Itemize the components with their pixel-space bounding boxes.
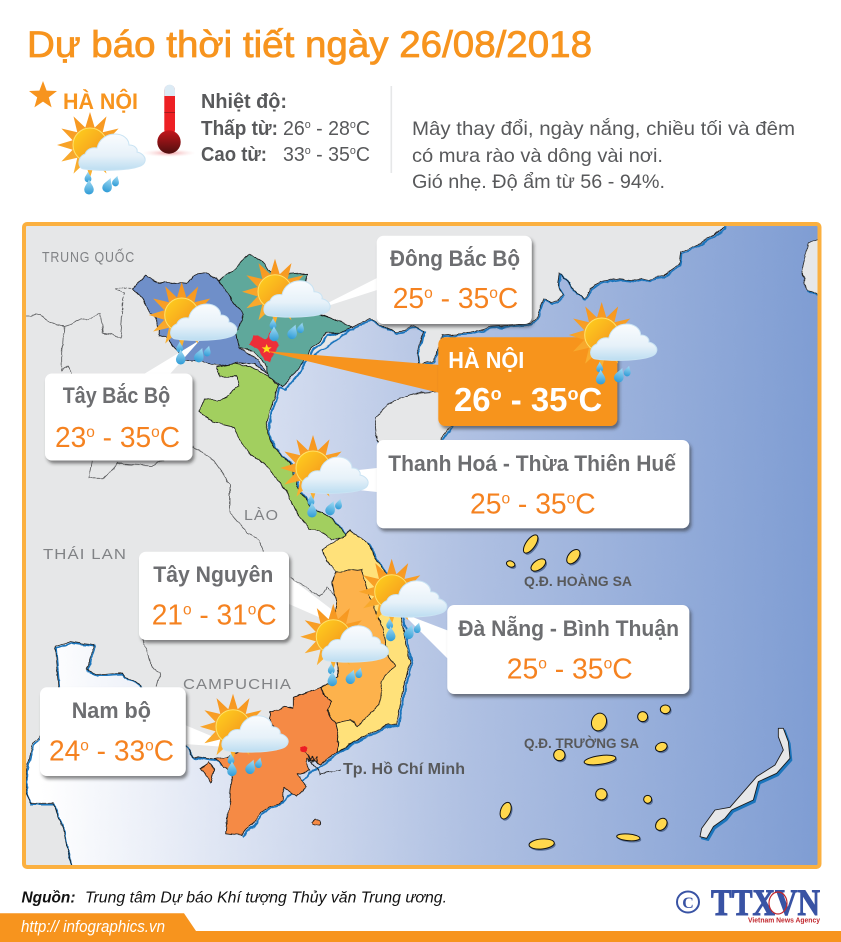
description text: Gió nhẹ. Độ ẩm từ 56 - 94%. [412, 171, 665, 193]
region: Thanh Hoá - Thừa Thiên Huế [198, 363, 347, 538]
temperature text: Thấp từ: [201, 118, 278, 140]
callout: Hà Nội [265, 337, 617, 426]
callout: Hà Nội: - 35 [502, 381, 567, 418]
icon: weather Nam bộ [200, 694, 288, 776]
callout: Đông Bắc Bộ: o [424, 285, 433, 302]
sea [25, 217, 837, 873]
callout: Đà Nẵng - Bình Thuận: 25 [507, 653, 539, 685]
callout: Hà Nội: C [579, 381, 602, 418]
region: Đông Bắc Bộ [220, 253, 352, 387]
callout: Nam bộ: - 33 [89, 736, 145, 768]
temperature text: Cao từ: [201, 144, 267, 166]
temperature text [201, 91, 370, 166]
callout: Tây Nguyên: o [183, 601, 192, 618]
callout: Đà Nẵng - Bình Thuận: Đà Nẵng - Bình Thuận [458, 616, 679, 641]
archipelago and city labels: Q.Đ. HOÀNG SA [524, 573, 632, 589]
blue coast shadow of Vietnam [242, 329, 412, 836]
callout: Hà Nội: 26 [454, 381, 491, 418]
callout: Tây Nguyên: 21 [152, 599, 184, 631]
callout: Nam bộ [40, 687, 240, 776]
country labels: LÀO [244, 507, 279, 524]
footer bar [0, 913, 841, 942]
callout: Hà Nội: o [567, 384, 579, 404]
temperature text: - 35 [311, 144, 350, 166]
footer link: http:// infographics.vn [21, 917, 165, 936]
region: Tây Nguyên [322, 569, 395, 727]
land: Hainan [377, 426, 454, 443]
panel: Hanoi forecast header [29, 81, 795, 194]
icon: weather Đà Nẵng [359, 559, 447, 641]
heading: Hà Nội: HÀ NỘI [63, 89, 138, 114]
callout: Đông Bắc Bộ: o [489, 285, 498, 302]
callout: Thanh Hoá - Thừa Thiên Huế: - 35 [510, 488, 567, 520]
temperature text: o [350, 119, 356, 131]
icon: star [29, 81, 57, 107]
callout: Đà Nẵng - Bình Thuận: o [604, 655, 612, 672]
icon: Hanoi star [262, 344, 272, 353]
temperature text: C [356, 118, 370, 140]
callout: Tây Nguyên: - 31 [192, 599, 248, 631]
panel: map [24, 217, 838, 875]
icon: sun, cloud and rain [57, 112, 145, 194]
icon: thermometer [142, 85, 196, 157]
callout: Nam bộ: o [145, 738, 154, 755]
region: Đà Nẵng - Bình Thuận [322, 530, 410, 752]
callout: Đông Bắc Bộ [312, 236, 532, 324]
callout: Tây Nguyên: C [256, 599, 277, 631]
callout: Đà Nẵng - Bình Thuận: - 35 [547, 653, 604, 685]
temperature text: 26 [283, 118, 305, 140]
icon: weather Hà Nội [569, 302, 657, 384]
callout: Tây Nguyên: o [248, 601, 257, 618]
map frame [24, 224, 820, 867]
Ho Chi Minh City marker [300, 745, 340, 775]
region: Tây Bắc Bộ [133, 273, 270, 375]
icon: weather Tây Nguyên [300, 604, 388, 686]
archipelago and city labels: Q.Đ. TRƯỜNG SA [524, 734, 639, 751]
callout: Nam bộ: C [154, 736, 174, 768]
callout: Nam bộ: 24 [49, 736, 81, 768]
description text: có mưa rào và dông vài nơi. [412, 145, 663, 167]
callout: Tây Nguyên: Tây Nguyên [153, 562, 273, 587]
callout: Đà Nẵng - Bình Thuận [402, 605, 689, 694]
land borders [27, 288, 335, 687]
callout: Thanh Hoá - Thừa Thiên Huế [340, 440, 689, 528]
logo: TTXVN [677, 883, 821, 924]
icon: weather Thanh Hoá [280, 435, 368, 518]
callout: Đà Nẵng - Bình Thuận: C [612, 653, 633, 685]
archipelago and city labels: Tp. Hồ Chí Minh [343, 761, 465, 778]
callout: Nam bộ: o [80, 738, 89, 755]
country labels: CAMPUCHIA [183, 676, 292, 693]
callout: Hà Nội: o [491, 384, 502, 404]
description text: Mây thay đổi, ngày nắng, chiều tối và đêm [412, 117, 795, 140]
callout: Tây Nguyên [139, 552, 335, 640]
country labels: TRUNG QUỐC [42, 248, 135, 266]
callout: Thanh Hoá - Thừa Thiên Huế: o [567, 490, 575, 507]
islands: Hoàng Sa and Trường Sa [498, 533, 792, 852]
callout: Tây Bắc Bộ: o [151, 424, 160, 441]
callout: Hà Nội: HÀ NỘI [448, 346, 524, 373]
archipelago and city labels [343, 573, 639, 778]
callout: Đà Nẵng - Bình Thuận: o [538, 655, 547, 672]
callout: Tây Bắc Bộ: Tây Bắc Bộ [63, 383, 170, 408]
region: Hà Nội [250, 332, 278, 363]
temperature text: C [356, 144, 370, 166]
callout: Tây Bắc Bộ: - 35 [95, 422, 151, 454]
callout: Đông Bắc Bộ: 25 [393, 283, 425, 315]
region: Nam bộ [200, 688, 338, 835]
callout: Tây Bắc Bộ [45, 340, 200, 460]
country labels: THÁI LAN [43, 546, 127, 563]
temperature text: - 28 [311, 118, 350, 140]
temperature text: 33 [283, 144, 305, 166]
logo: TTXVN: TTXVN [711, 883, 820, 924]
icon: weather Tây Bắc [149, 282, 237, 364]
callout: Thanh Hoá - Thừa Thiên Huế: C [575, 488, 596, 520]
callout: Thanh Hoá - Thừa Thiên Huế: 25 [470, 488, 502, 520]
icon: weather Đông Bắc [242, 259, 330, 341]
callout: Đông Bắc Bộ: Đông Bắc Bộ [390, 246, 520, 271]
callout: Đông Bắc Bộ: C [498, 283, 518, 315]
callout: Nam bộ: Nam bộ [72, 698, 151, 723]
callout: Thanh Hoá - Thừa Thiên Huế: Thanh Hoá - Thừa Thiên Huế [388, 451, 677, 476]
land: Luzon [807, 290, 818, 296]
temperature text: o [305, 145, 311, 157]
temperature text: o [350, 145, 356, 157]
logo: TTXVN: Vietnam News Agency [748, 916, 821, 924]
source line: Nguồn: [22, 890, 76, 906]
callout: Thanh Hoá - Thừa Thiên Huế: o [501, 490, 510, 507]
temperature text: o [305, 119, 311, 131]
callout: Đông Bắc Bộ: - 35 [433, 283, 489, 315]
country labels [42, 248, 292, 693]
callout: Tây Bắc Bộ: o [86, 424, 95, 441]
description text [412, 117, 795, 193]
logo: TTXVN: C [682, 895, 694, 912]
temperature text: Nhiệt độ: [201, 91, 287, 113]
title: Dự báo thời tiết ngày 26/08/2018 [27, 24, 592, 65]
source line: Trung tâm Dự báo Khí tượng Thủy văn Trung ương. [85, 890, 447, 906]
callout: Tây Bắc Bộ: C [160, 422, 180, 454]
callout: Tây Bắc Bộ: 23 [55, 422, 87, 454]
